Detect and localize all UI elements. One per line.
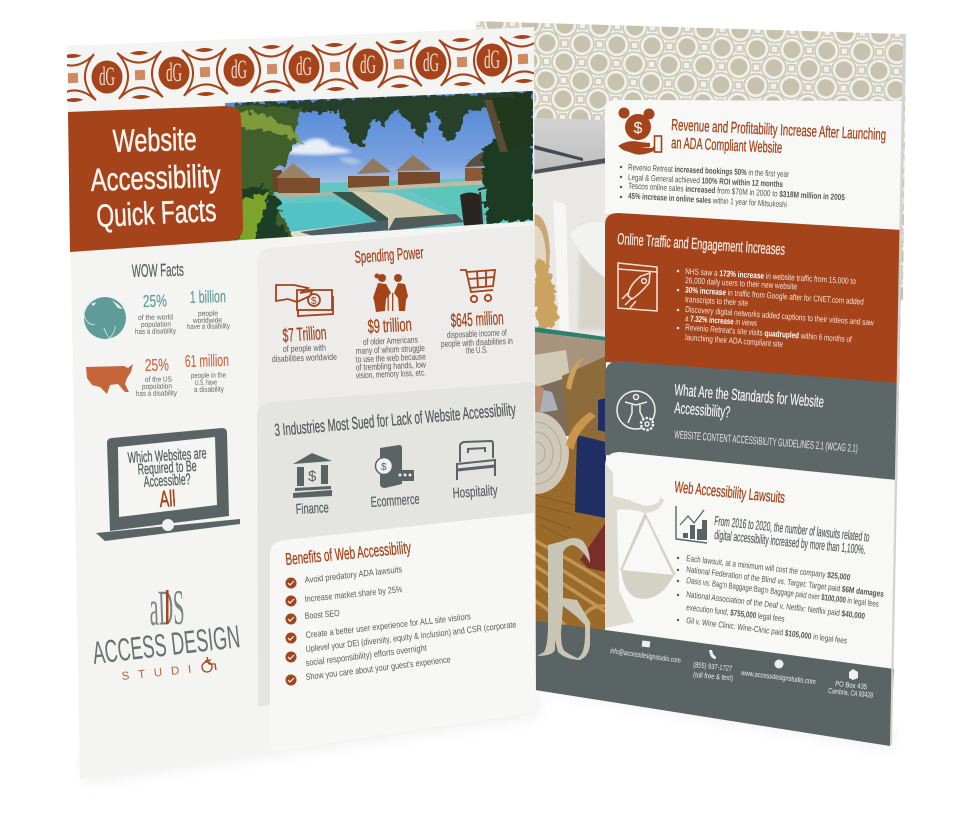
pier <box>348 180 492 192</box>
pattern band: dG <box>296 52 312 81</box>
heading: industries: 3 Industries Most Sued for Lack of Website Accessibility <box>274 399 517 440</box>
icon: phone ecommerce <box>376 445 414 488</box>
top white panel <box>605 100 903 232</box>
label: finance: Finance <box>295 500 329 518</box>
logo: Access Design Studio: aDS <box>148 579 185 636</box>
logo: Access Design Studio <box>91 579 242 683</box>
icon: hand paying cash <box>276 285 333 316</box>
stat: 1 billion: have a disability <box>187 321 230 331</box>
stat: US 25% <box>136 355 177 398</box>
list: benefits: Show you care about your guest's experience <box>305 654 451 682</box>
list: lawsuits: National Association of the Deaf v. Netflix: Netflix paid $40,000 <box>686 589 866 621</box>
pattern band: dG <box>99 62 115 91</box>
decorative scales figure <box>605 463 676 628</box>
list: lawsuits: execution fund, $755,000 legal fees <box>686 602 785 624</box>
title: Accessibility <box>90 157 221 198</box>
list: benefits: social responsibility) efforts overnight <box>305 643 428 668</box>
stat: 1 billion <box>187 287 230 331</box>
list: benefits: Increase market share by 25% <box>304 584 403 604</box>
list: traffic facts <box>677 266 875 349</box>
heading: WOW facts: WOW Facts <box>132 260 184 281</box>
icon: laptop with question <box>96 428 240 541</box>
section: WOW facts <box>84 260 230 398</box>
front page sheet <box>67 27 536 779</box>
furniture <box>460 192 483 226</box>
icon: accessibility person and gear <box>617 391 655 430</box>
icon: hand with coins <box>618 108 662 155</box>
heading: revenue <box>671 117 886 157</box>
list: traffic facts: launching their ADA compliant site <box>685 332 784 349</box>
icon: envelope <box>642 641 650 647</box>
icon: bank: $ <box>308 468 317 485</box>
pattern band: dG <box>360 50 376 79</box>
stat: world 25%: of the world <box>138 312 173 322</box>
list: lawsuits: Each lawsuit, at a minimum will cost the company $25,000 <box>686 553 851 582</box>
pattern band: dG <box>231 55 247 84</box>
list: revenue facts: Legal & General achieved 100% ROI within 12 months <box>628 172 783 189</box>
icon: rocket <box>618 263 657 311</box>
panel: resort photo <box>225 90 535 244</box>
footer contact details: Cambria, CA 93428 <box>828 686 873 700</box>
back page pattern <box>475 21 906 300</box>
panel: white lawsuits panel <box>605 452 897 670</box>
stat: world 25%: 25% <box>143 291 167 311</box>
icon: hand paying cash: $ <box>311 296 317 307</box>
heading: benefits: Benefits of Web Accessibility <box>285 538 412 569</box>
list: lawsuits <box>677 553 885 646</box>
stat: $9 trillion <box>356 315 426 380</box>
icon: phone <box>709 650 716 659</box>
palm fronds and foliage <box>225 91 533 244</box>
stat: $7 trillion: of people with <box>283 343 326 354</box>
stat: $645 million: disposable income of <box>447 327 507 340</box>
decorative monogram <box>537 538 590 660</box>
stat: $7 trillion <box>272 323 337 364</box>
section: benefits <box>285 538 517 686</box>
title: Website <box>112 121 197 159</box>
stat: 61 million: U.S. have <box>195 378 217 387</box>
list: traffic facts: 26,000 daily users to their new website <box>685 275 797 291</box>
icon: USA map <box>86 364 133 394</box>
list: traffic facts: transcripts to their site <box>685 294 749 308</box>
icon: phone ecommerce: $ <box>381 462 387 473</box>
icon: hand with coins: $ <box>634 120 642 137</box>
icon: globe <box>774 660 784 668</box>
icon: bed <box>457 441 495 480</box>
heading: spending power: Spending Power <box>354 243 424 267</box>
stat: $9 trillion: to use the web because <box>356 351 426 364</box>
list: traffic facts: 30% increase in traffic from Google after for CNET.com added <box>685 285 864 307</box>
panel: gray standards panel <box>605 361 899 481</box>
stat: $645 million <box>441 308 513 355</box>
heading: standards: Accessibility? <box>674 400 731 422</box>
footer contact details: PO Box 435 <box>835 679 868 691</box>
stat: 1 billion: people <box>198 309 218 318</box>
panel: back page <box>475 21 906 746</box>
label: hospitality: Hospitality <box>452 483 499 502</box>
footer contact details <box>610 641 873 700</box>
stat: 61 million <box>185 351 229 394</box>
heading: standards <box>674 382 825 422</box>
text: lawsuit statistic <box>714 513 870 557</box>
heading: lawsuits: Web Accessibility Lawsuits <box>674 479 786 507</box>
panel: industries background <box>257 382 535 707</box>
text: which websites: Required to Be <box>137 458 197 478</box>
stat: US 25%: of the US <box>145 375 172 384</box>
stat: $9 trillion: many of whom struggle <box>356 343 425 356</box>
panel: interior photo <box>534 118 606 630</box>
heading: online traffic: Online Traffic and Engagement Increases <box>617 231 785 259</box>
panel: benefits background <box>270 513 536 752</box>
stat: $645 million: people with disabilities in <box>441 336 513 349</box>
right page edge <box>890 34 906 745</box>
stat: 61 million: a disability <box>194 384 224 394</box>
icon: wheelchair mark <box>202 657 216 672</box>
stat: 61 million: people in the <box>191 370 226 380</box>
pattern band: dG <box>423 48 439 77</box>
icon: bank <box>293 453 332 498</box>
list: benefits: Create a better user experience for ALL site visitors <box>305 611 472 640</box>
page shadows <box>84 670 892 782</box>
footer contact details: info@accessdesignstudio.com <box>610 646 681 665</box>
heading: standards: What Are the Standards for Website <box>674 382 825 411</box>
footer contact details: www.accessdesignstudio.com <box>740 668 816 686</box>
panel: spending power background <box>257 225 535 420</box>
icon: location box <box>849 669 858 680</box>
section: industries <box>274 399 517 518</box>
text: which websites <box>127 445 207 512</box>
stat: $9 trillion: of trembling hands, low <box>356 359 426 372</box>
list: benefits <box>304 564 517 682</box>
logo subline: STUDI <box>121 664 192 683</box>
list: revenue facts: 45% increase in online sales within 1 year for Mitsukoshi <box>628 191 787 209</box>
footer contact details: (toll free & text) <box>693 670 734 683</box>
logo wordmark: ACCESS DESIGN <box>91 618 242 671</box>
text: which websites: Which Websites are <box>127 445 207 467</box>
icon: older couple <box>373 274 408 312</box>
panel: title block <box>68 106 243 252</box>
pattern band: dG <box>166 58 182 87</box>
list: lawsuits: National Federation of the Blind vs. Target: Target paid $6M damages <box>686 564 885 599</box>
stat: 1 billion: 1 billion <box>190 287 226 307</box>
stat: 61 million: 61 million <box>185 351 229 371</box>
list: traffic facts: Revenio Retreat's site visits quadrupled within 6 months of <box>685 322 853 344</box>
stat: world 25% <box>135 291 176 336</box>
stat: world 25%: population <box>141 319 171 329</box>
icon: globe <box>84 297 126 339</box>
text: which websites: All <box>159 485 176 512</box>
stat: $9 trillion: of older Americans <box>363 335 418 347</box>
stat: US 25%: has a disability <box>136 388 177 398</box>
list: traffic facts: Discovery digital networks added captions to their videos and saw <box>685 304 875 328</box>
title <box>90 121 221 234</box>
pattern band: dG <box>484 45 500 74</box>
list: traffic facts: a 7.32% increase in views <box>685 313 757 328</box>
huts <box>270 151 485 193</box>
panel: rust traffic panel <box>605 213 902 384</box>
stat: world 25%: has a disability <box>135 326 176 336</box>
stat: US 25%: population <box>142 381 172 391</box>
icon: shopping cart <box>460 270 495 302</box>
list: lawsuits: Oasis vs. Bag'n Baggage:Bag'n Baggage paid over $100,000 in legal fees <box>686 575 880 609</box>
list: revenue facts: Revenio Retreat increased bookings 50% in the first year <box>628 162 789 179</box>
panel: front page <box>50 27 546 779</box>
title: Quick Facts <box>95 192 217 234</box>
list: lawsuits: Gil v. Wine Clinic: Wine-Clinic paid $105,000 in legal fees <box>686 615 848 646</box>
stat: 1 billion: worldwide <box>192 315 222 325</box>
list: benefits: Uplevel your DEI (diversity, equity & inclusion) and CSR (corporate <box>305 619 517 654</box>
list: revenue facts <box>620 162 845 209</box>
list: benefits: Avoid predatory ADA lawsuits <box>304 564 403 585</box>
stat: $645 million: $645 million <box>450 308 504 332</box>
heading: revenue: an ADA Compliant Website <box>671 135 783 157</box>
pattern band <box>50 35 546 102</box>
label: ecommerce: Ecommerce <box>370 492 420 511</box>
check icons <box>286 578 296 686</box>
stat: $645 million: the U.S. <box>466 345 488 355</box>
stat: $9 trillion: vision, memory loss, etc. <box>356 367 426 380</box>
stat: $7 trillion: disabilities worldwide <box>272 352 337 364</box>
text: which websites: Accessible? <box>143 471 191 491</box>
page lower fade <box>258 705 270 753</box>
panel: footer <box>535 621 894 746</box>
stat: $7 trillion: $7 Trillion <box>282 323 327 347</box>
stat: $9 trillion: $9 trillion <box>367 315 412 338</box>
icon: bar chart <box>676 506 707 543</box>
list: benefits: Boost SEO <box>304 608 340 621</box>
list: traffic facts: NHS saw a 173% increase in website traffic from 15,000 to <box>685 266 856 286</box>
logo monogram <box>148 579 185 636</box>
section: spending power <box>272 243 513 380</box>
footer contact details: (855) 937-1727 <box>693 660 733 673</box>
list: revenue facts: Tescos online sales increased from $70M in 2000 to $318M million in 2005 <box>628 181 845 202</box>
stat: US 25%: 25% <box>145 355 169 375</box>
